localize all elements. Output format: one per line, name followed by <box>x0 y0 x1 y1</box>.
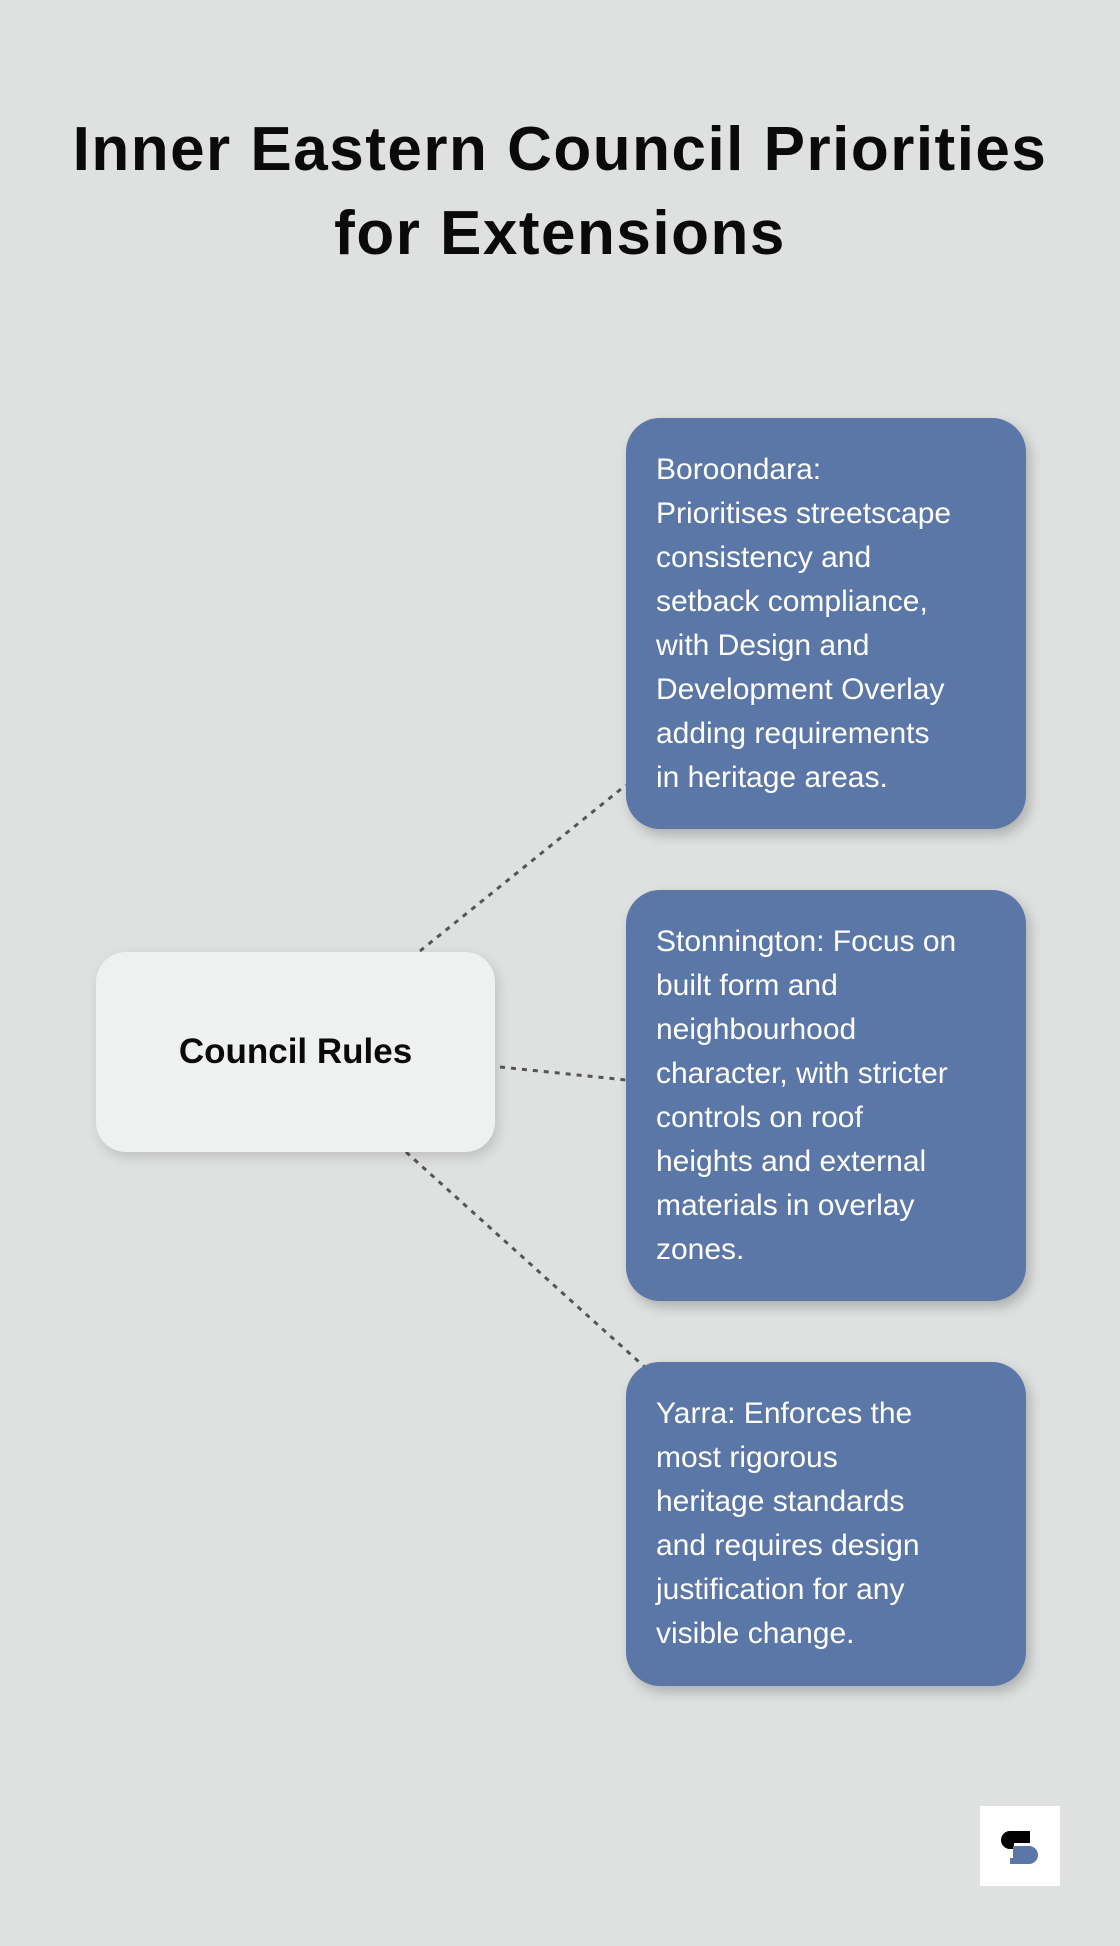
box: Yarra: heritage standards <box>656 1485 904 1518</box>
box: Boroondara: consistency and <box>656 541 871 574</box>
box: Stonnington: zones. <box>656 1233 744 1266</box>
box: Stonnington: materials in overlay <box>656 1189 914 1222</box>
box: Stonnington: controls on roof <box>656 1101 863 1134</box>
box: Yarra: and requires design <box>656 1529 920 1562</box>
center node: Council Rules <box>96 952 495 1152</box>
box: Stonnington: neighbourhood <box>656 1013 856 1046</box>
box: Boroondara: in heritage areas. <box>656 761 888 794</box>
box: Stonnington: character, with stricter <box>656 1057 948 1090</box>
box: Yarra: most rigorous <box>656 1441 838 1474</box>
box: Boroondara: Prioritises streetscape <box>656 497 951 530</box>
box: Boroondara: Development Overlay <box>656 673 944 706</box>
box: Boroondara: with Design and <box>656 629 869 662</box>
box: Stonnington <box>626 890 1026 1301</box>
box: Stonnington: Stonnington: Focus on <box>656 925 956 958</box>
logo <box>980 1806 1060 1886</box>
box: Stonnington: heights and external <box>656 1145 926 1178</box>
box: Boroondara: Boroondara: <box>656 453 821 486</box>
center node: Council Rules: Council Rules <box>179 1032 412 1071</box>
box: Yarra <box>626 1362 1026 1686</box>
box: Boroondara: adding requirements <box>656 717 930 750</box>
box: Stonnington: built form and <box>656 969 838 1002</box>
box: Boroondara: setback compliance, <box>656 585 928 618</box>
box: Boroondara <box>626 418 1026 829</box>
box: Yarra: justification for any <box>656 1573 904 1606</box>
title: for Extensions <box>334 199 786 268</box>
title: Inner Eastern Council Priorities <box>73 115 1047 184</box>
box: Yarra: Yarra: Enforces the <box>656 1397 912 1430</box>
title <box>73 115 1047 268</box>
box: Yarra: visible change. <box>656 1617 854 1650</box>
